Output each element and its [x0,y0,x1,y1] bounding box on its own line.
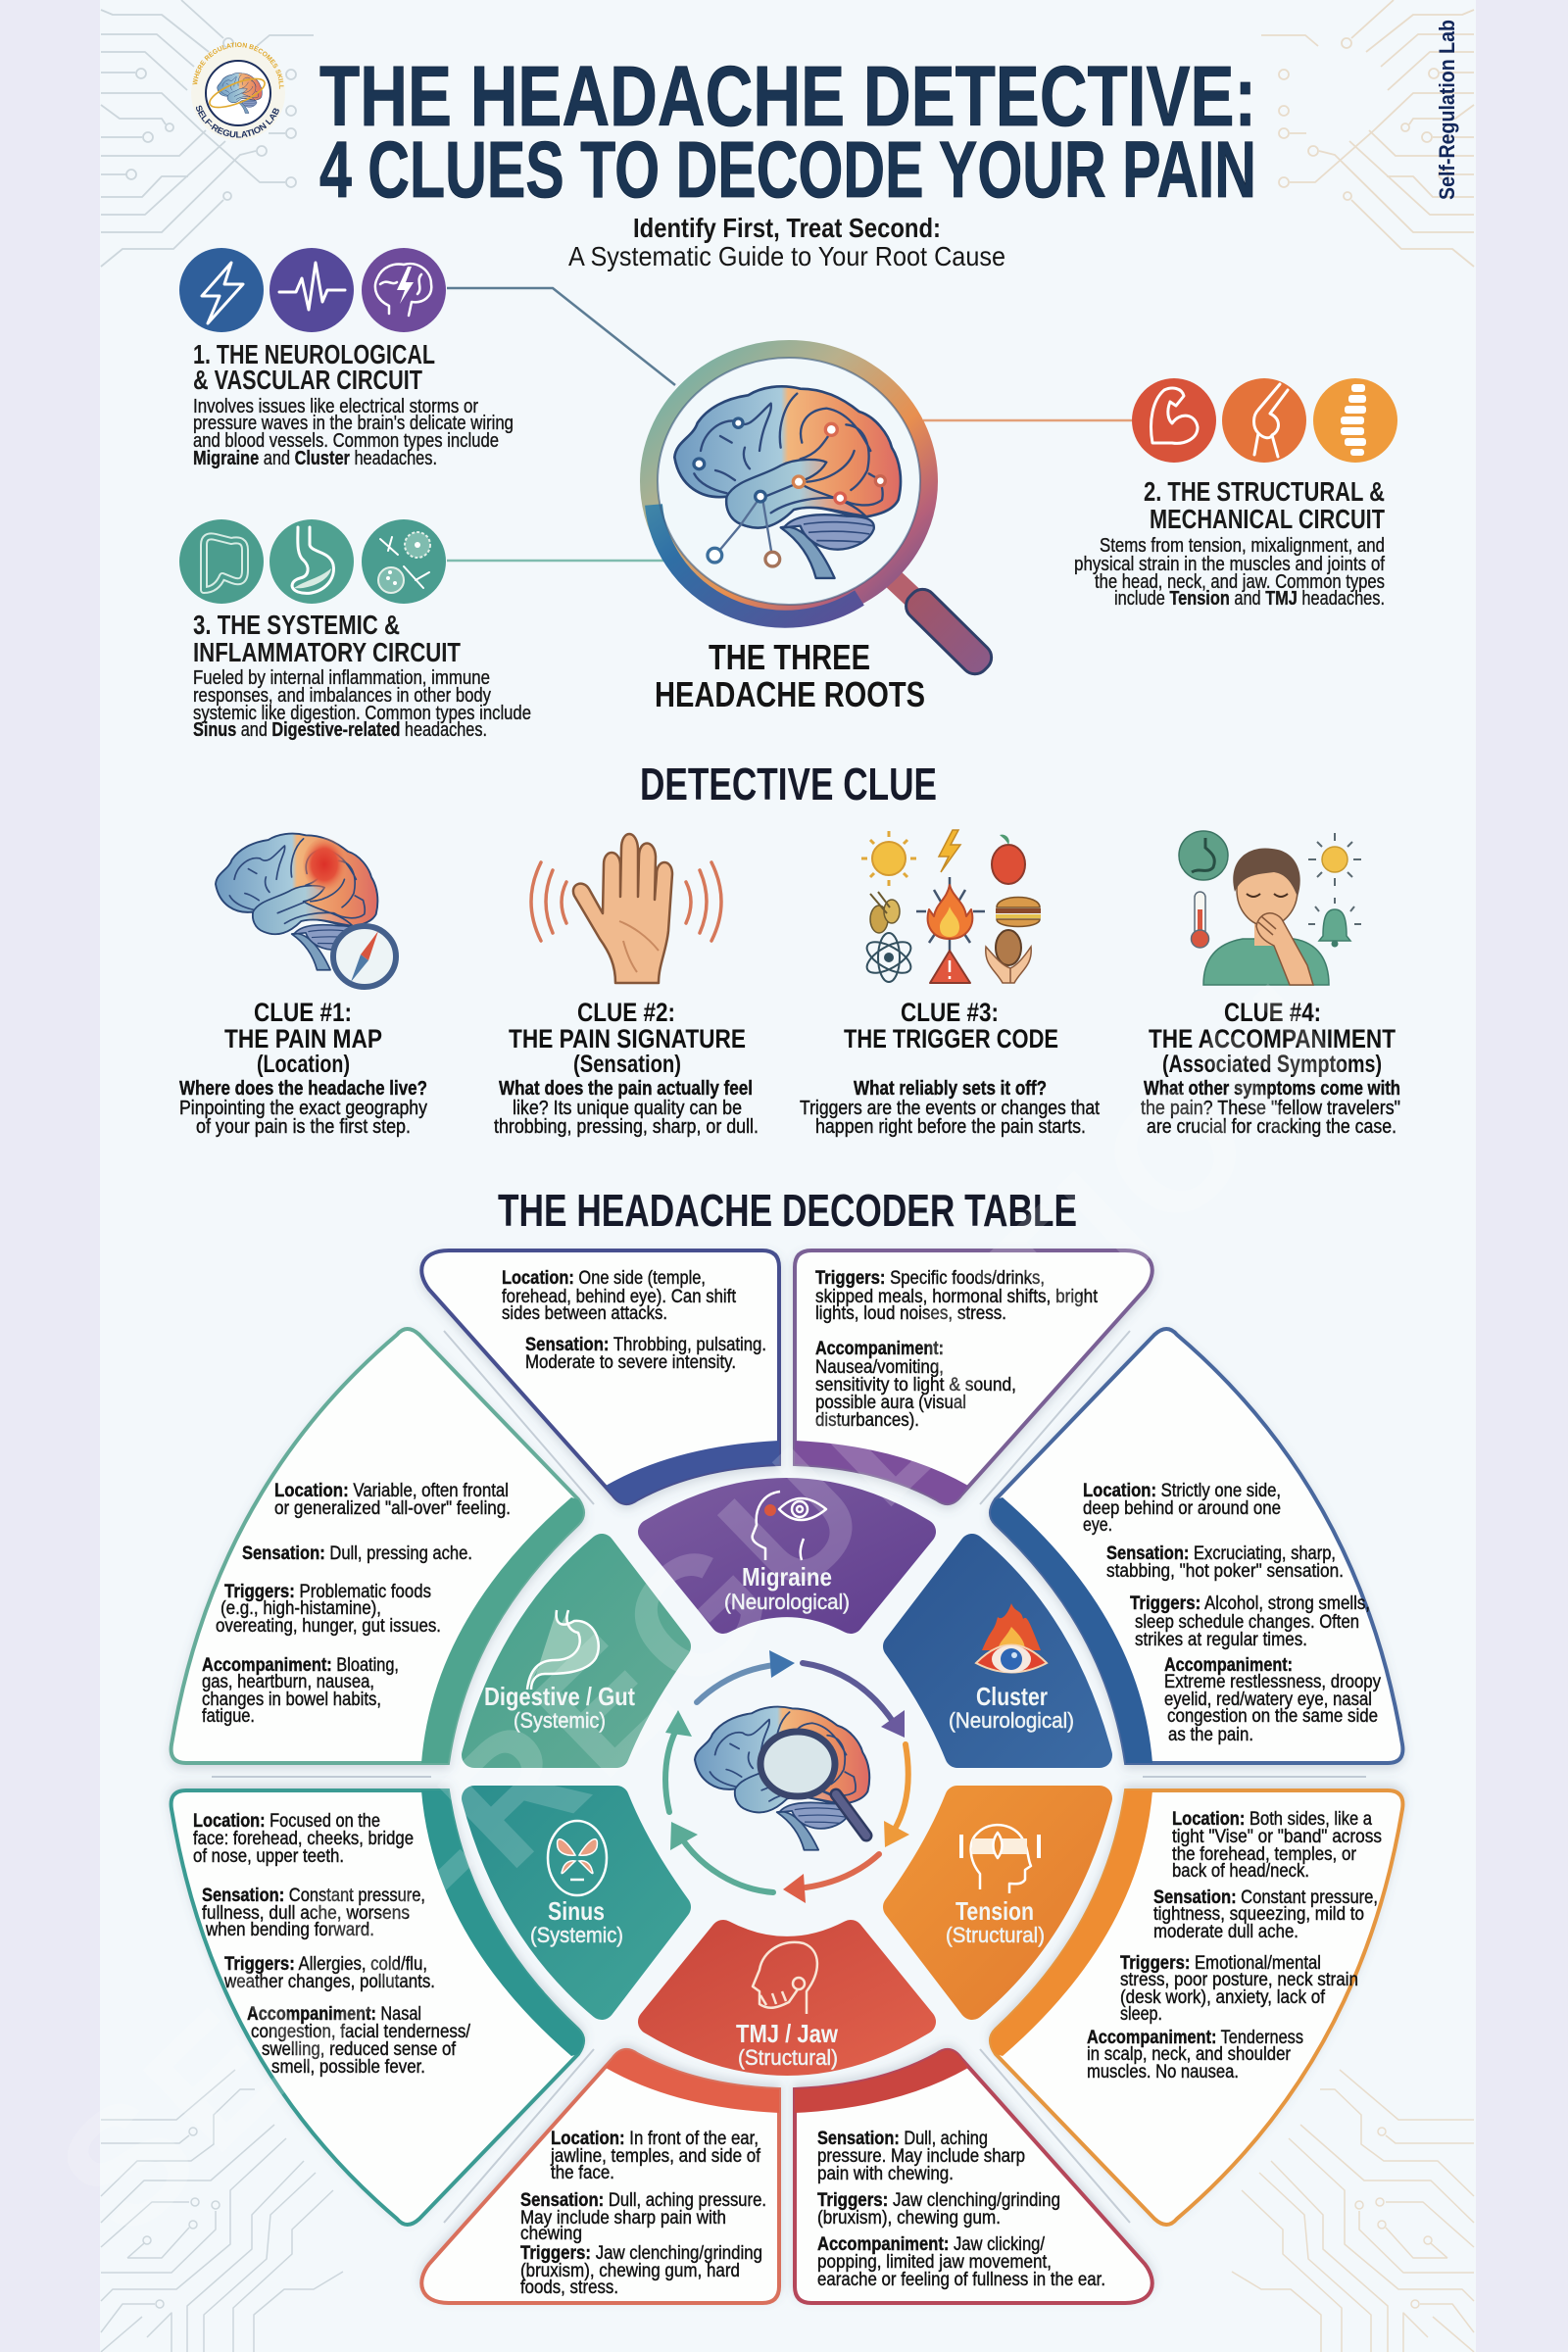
clue 2 text: like? Its unique quality can be [513,1098,742,1119]
clue 4 text: the pain? These "fellow travelers" [1141,1098,1400,1119]
panel: tmj left: Triggers: Jaw clenching/grinding [520,2243,762,2264]
center brain with magnifier [695,1707,869,1850]
clue 1 text: Pinpointing the exact geography [179,1098,427,1119]
panel: tmj right: popping, limited jaw movement, [817,2252,1052,2273]
panel: cluster: Extreme restlessness, droopy [1164,1672,1381,1692]
hub: tension [896,1798,1100,2007]
panel: migraine right: Accompaniment: [815,1339,944,1359]
block: systemic circuit: responses, and imbalances in other body [193,685,491,707]
clue 1 text [179,998,427,1138]
connector: structural [923,419,1132,421]
clue 2 text: THE PAIN SIGNATURE [509,1024,746,1054]
icon: stomach [270,519,354,604]
clue 4 text: are crucial for cracking the case. [1147,1116,1396,1138]
panel: migraine left: Location: One side (temple, [502,1268,706,1289]
icon: lightning bolt [179,248,264,332]
block: systemic circuit [193,610,531,741]
hub: migraine: Migraine [742,1562,832,1592]
panel: cluster: stabbing, "hot poker" sensation. [1106,1561,1344,1582]
panel: sinus: Sensation: Constant pressure, [202,1886,425,1906]
hub: sinus: Sinus [548,1896,605,1926]
panel: migraine right [795,1250,1152,1503]
panel: sinus: congestion, facial tenderness/ [251,2022,471,2042]
panel: tension: Accompaniment: Tenderness [1087,2028,1303,2048]
panel: migraine right: disturbances). [815,1410,919,1431]
panel: digestive: or generalized "all-over" feeling. [274,1498,511,1519]
panel: tension: moderate dull ache. [1153,1922,1298,1942]
panel: tmj left: jawline, temples, and side of [550,2146,761,2167]
icon: muscle [1132,378,1216,463]
panel: tmj right: pressure. May include sharp [817,2146,1025,2167]
heading: the three headache roots [655,637,925,714]
block: systemic circuit: systemic like digestion. Common types include [193,703,531,724]
bell [1308,898,1361,947]
panel: tension: sleep. [1120,2004,1162,2025]
clue 3 text: CLUE #3: [901,998,999,1027]
clue 1 text: (Location) [257,1051,350,1078]
panel: tension: Location: Both sides, like a [1172,1809,1372,1830]
panel: digestive: overeating, hunger, gut issues. [216,1616,441,1637]
panel: tmj right: (bruxism), chewing gum. [817,2208,1001,2229]
panel: digestive: Location: Variable, often frontal [274,1481,509,1501]
panel: tmj left: the face. [551,2163,614,2183]
panel: migraine right: sensitivity to light & sound, [815,1375,1016,1396]
panel: digestive: (e.g., high-histamine), [220,1598,381,1619]
icon: stomach [527,1610,599,1690]
clue 2 text: throbbing, pressing, sharp, or dull. [494,1116,759,1138]
hub: cluster [896,1546,1100,1755]
panel: tmj left: chewing [520,2224,582,2244]
panel: cluster: deep behind or around one [1083,1498,1281,1519]
hub: cluster: (Neurological) [949,1708,1074,1733]
clue 1 text: Where does the headache live? [179,1078,427,1100]
icon: jaw skull [753,1942,817,2014]
icon: person with associated symptoms [1179,831,1361,985]
brain network nodes [694,418,885,566]
block: systemic circuit: Fueled by internal inflammation, immune [193,667,490,689]
panel: sinus: Location: Focused on the [193,1811,380,1832]
panel: cluster: as the pain. [1168,1725,1253,1745]
icon: hand with vibration waves [531,834,721,983]
clue 2 text: CLUE #2: [577,998,675,1027]
clue 4 text: THE ACCOMPANIMENT [1149,1024,1396,1054]
heading: decoder table: THE HEADACHE DECODER TABLE [498,1185,1077,1236]
block: neurological circuit: Involves issues like electrical storms or [193,396,478,417]
hub: tmj jaw [651,1933,923,2070]
logo badge: WHERE REGULATION BECOMES SKILL [192,42,284,89]
clue 2 text [494,998,759,1138]
center cycle arrows [665,1650,909,1903]
arrow: blue [697,1650,795,1702]
hub: cluster: Cluster [976,1682,1048,1711]
block: structural circuit [1074,476,1385,610]
panel: digestive: Triggers: Problematic foods [224,1582,431,1602]
hands with food [986,930,1031,983]
clue 3 text: Triggers are the events or changes that [800,1098,1100,1119]
panel: digestive: Sensation: Dull, pressing ache. [242,1544,472,1564]
block: neurological circuit: & VASCULAR CIRCUIT [193,365,422,395]
panel: tension [991,1790,1402,2225]
icon: head with band [961,1825,1039,1893]
clue 3 text [800,998,1100,1138]
connector: neurological [447,288,675,385]
clue 4 text: CLUE #4: [1224,998,1321,1027]
clue 1 text: of your pain is the first step. [196,1116,411,1138]
hub: sinus: (Systemic) [530,1923,623,1947]
magnifier handle [882,568,997,680]
arrow: green lower [670,1822,773,1892]
panel: tension: stress, poor posture, neck strain [1120,1970,1358,1990]
subtitle: A Systematic Guide to Your Root Cause [568,241,1005,271]
subtitle [568,213,1005,271]
block: structural circuit: MECHANICAL CIRCUIT [1150,504,1385,534]
connector: systemic [447,560,666,562]
block: systemic circuit: Sinus and Digestive-related headaches. [193,719,487,741]
circuit pattern top left [101,0,314,267]
panel: tension: the forehead, temples, or [1172,1844,1357,1865]
panel: migraine left: Moderate to severe intensity. [525,1352,736,1373]
panel: tension: tight "Vise" or "band" across [1172,1827,1382,1847]
panel: tmj left: Location: In front of the ear, [551,2129,759,2149]
panel: tmj left: (bruxism), chewing gum, hard [520,2261,740,2281]
clue 2 text: (Sensation) [573,1051,681,1078]
panel: sinus: Accompaniment: Nasal [247,2004,421,2025]
panel: sinus: weather changes, pollutants. [223,1972,435,1992]
icon: knee [1222,378,1306,463]
lightning [939,830,960,872]
hub: digestive: (Systemic) [514,1708,606,1733]
thermometer [1192,892,1209,948]
icon: flaming eye [976,1603,1047,1673]
sun [1308,833,1361,886]
clue 2 text: What does the pain actually feel [499,1078,753,1100]
circuit pattern top right [1261,0,1474,267]
block: structural circuit: Stems from tension, mixalignment, and [1100,535,1385,557]
circuit pattern bottom right [1232,2070,1474,2352]
panel: tension: (desk work), anxiety, lack of [1120,1987,1326,2008]
panel: tension: Triggers: Emotional/mental [1120,1953,1321,1974]
panel: migraine left [421,1250,779,1503]
panel: cluster: strikes at regular times. [1135,1630,1307,1650]
panel: tmj right: Sensation: Dull, aching [817,2129,988,2149]
block: systemic circuit: INFLAMMATORY CIRCUIT [193,637,461,667]
block: systemic circuit: 3. THE SYSTEMIC & [193,610,400,640]
arrow: orange [884,1744,909,1847]
block: structural circuit: the head, neck, and jaw. Common types [1095,571,1385,593]
clue 3 text: happen right before the pain starts. [815,1116,1086,1138]
title [319,49,1256,215]
panel: digestive: fatigue. [202,1706,255,1727]
panel: tmj right: Triggers: Jaw clenching/grinding [817,2190,1060,2211]
magnifying glass with brain [649,349,997,680]
panel: tension: Sensation: Constant pressure, [1153,1887,1378,1908]
panel: cluster: Sensation: Excruciating, sharp, [1106,1544,1336,1564]
panel: sinus: face: forehead, cheeks, bridge [193,1829,414,1849]
panel: tmj right: earache or feeling of fullness in the ear. [817,2270,1105,2290]
icon: pain map brain and compass [216,834,396,987]
clue 3 text: What reliably sets it off? [854,1078,1047,1100]
panel: migraine right: lights, loud noises, stress. [815,1303,1006,1324]
panel: digestive: gas, heartburn, nausea, [202,1672,374,1692]
apple [992,835,1025,884]
icon: colon [179,519,264,604]
subtitle: Identify First, Treat Second: [633,213,941,243]
panel: tension: back of head/neck. [1172,1861,1309,1882]
icon: sinus face [548,1821,607,1895]
title: THE HEADACHE DETECTIVE: [319,49,1256,144]
arrow: purple [803,1663,905,1738]
panel: tmj left: foods, stress. [520,2278,618,2298]
block: neurological circuit: 1. THE NEUROLOGICAL [193,339,435,369]
brain [674,386,901,578]
panel: tension: muscles. No nausea. [1087,2062,1239,2082]
panel: migraine left: Sensation: Throbbing, pulsating. [525,1335,766,1355]
icon: pulse [270,248,354,332]
clue 4 text: What other symptoms come with [1144,1078,1400,1100]
clue 1 text: CLUE #1: [254,998,352,1027]
sun [861,831,916,886]
panel: cluster: congestion on the same side [1167,1706,1378,1727]
panel: sinus: swelling, reduced sense of [262,2039,457,2060]
panel: cluster: eyelid, red/watery eye, nasal [1164,1690,1372,1710]
hub: tmj jaw: (Structural) [738,2045,838,2070]
hub: migraine: (Neurological) [724,1590,850,1614]
clue 1 text: THE PAIN MAP [224,1024,382,1054]
hub: tension: (Structural) [946,1923,1045,1947]
panel: migraine right: Nausea/vomiting, [815,1357,944,1378]
block: neurological circuit: and blood vessels. Common types include [193,430,499,452]
panel: migraine left: sides between attacks. [502,1303,667,1324]
panel: migraine right: Triggers: Specific foods/drinks, [815,1268,1045,1289]
block: neurological circuit [193,339,514,469]
clue 4 text: (Associated Symptoms) [1162,1051,1382,1078]
panel: digestive: changes in bowel habits, [202,1690,381,1710]
panel: sinus: of nose, upper teeth. [193,1846,344,1867]
panel: tmj left: Sensation: Dull, aching pressure. [520,2190,766,2211]
panel: tmj left: May include sharp pain with [520,2208,726,2229]
clue 4 text [1141,998,1400,1138]
pollen [870,892,900,933]
logo badge: SELF-REGULATION LAB [196,106,279,137]
panel: tension: in scalp, neck, and shoulder [1087,2044,1292,2065]
heading: the three headache roots: HEADACHE ROOTS [655,674,925,714]
panel: sinus: smell, possible fever. [271,2057,425,2078]
stomach badge [1179,831,1228,880]
hub: digestive: Digestive / Gut [484,1682,635,1711]
logo badge [191,42,285,140]
burger [996,898,1041,927]
icon: spine [1313,378,1397,463]
atom [862,933,915,982]
panel: tmj right [795,2050,1152,2303]
warning sign [930,951,970,983]
heading: the three headache roots: THE THREE [709,637,870,677]
circuit pattern bottom left [101,2070,343,2352]
block: structural circuit: physical strain in the muscles and joints of [1074,554,1385,575]
magnifier lens [649,349,929,619]
panel: tmj right: pain with chewing. [817,2164,954,2184]
icon: brain with bolt [362,248,446,332]
block: structural circuit: include Tension and TMJ headaches. [1114,588,1385,610]
hub: tmj jaw: TMJ / Jaw [736,2019,839,2048]
hub: sinus [474,1798,678,2007]
heading: detective clue: DETECTIVE CLUE [640,759,937,809]
flame [928,885,972,939]
panel: digestive: Accompaniment: Bloating, [202,1655,399,1676]
block: neurological circuit: pressure waves in the brain's delicate wiring [193,413,514,434]
block: neurological circuit: Migraine and Cluster headaches. [193,448,437,469]
separator lines between panels [212,1331,1366,2223]
clue 3 text: THE TRIGGER CODE [844,1024,1058,1054]
hub: migraine [651,1491,923,1621]
icon: trigger code cluster [861,830,1041,983]
watermark: SELF-REGULATION [24,944,1388,2271]
panel: migraine left: forehead, behind eye). Can shift [502,1287,737,1307]
panel: digestive [172,1329,583,1763]
panel: migraine right: possible aura (visual [815,1393,966,1413]
panel: sinus: Triggers: Allergies, cold/flu, [224,1954,427,1975]
panel: cluster: eye. [1083,1515,1112,1536]
icon: head with eye [753,1492,826,1560]
panel: sinus: when bending forward. [205,1920,374,1940]
hub: tension: Tension [956,1896,1034,1926]
arrow: green upper [665,1710,692,1812]
panel: sinus: fullness, dull ache, worsens [202,1903,410,1924]
block: structural circuit: 2. THE STRUCTURAL & [1144,476,1385,507]
panel: tmj right: Accompaniment: Jaw clicking/ [817,2234,1046,2255]
arrow: red [783,1854,879,1903]
panel: sinus [172,1790,583,2225]
panel: cluster: sleep schedule changes. Often [1135,1612,1359,1633]
panel: cluster [991,1329,1402,1763]
panel: cluster: Triggers: Alcohol, strong smells, [1130,1593,1370,1614]
panel: migraine right: skipped meals, hormonal shifts, bright [815,1287,1099,1307]
icon: inflammation cells [362,519,446,604]
panel: cluster: Location: Strictly one side, [1083,1481,1281,1501]
panel: tension: tightness, squeezing, mild to [1153,1904,1364,1925]
vertical brand label: Self-Regulation Lab [1435,20,1459,200]
panel: tmj left [421,2050,779,2303]
hub: digestive [474,1546,678,1755]
panel: cluster: Accompaniment: [1164,1655,1293,1676]
